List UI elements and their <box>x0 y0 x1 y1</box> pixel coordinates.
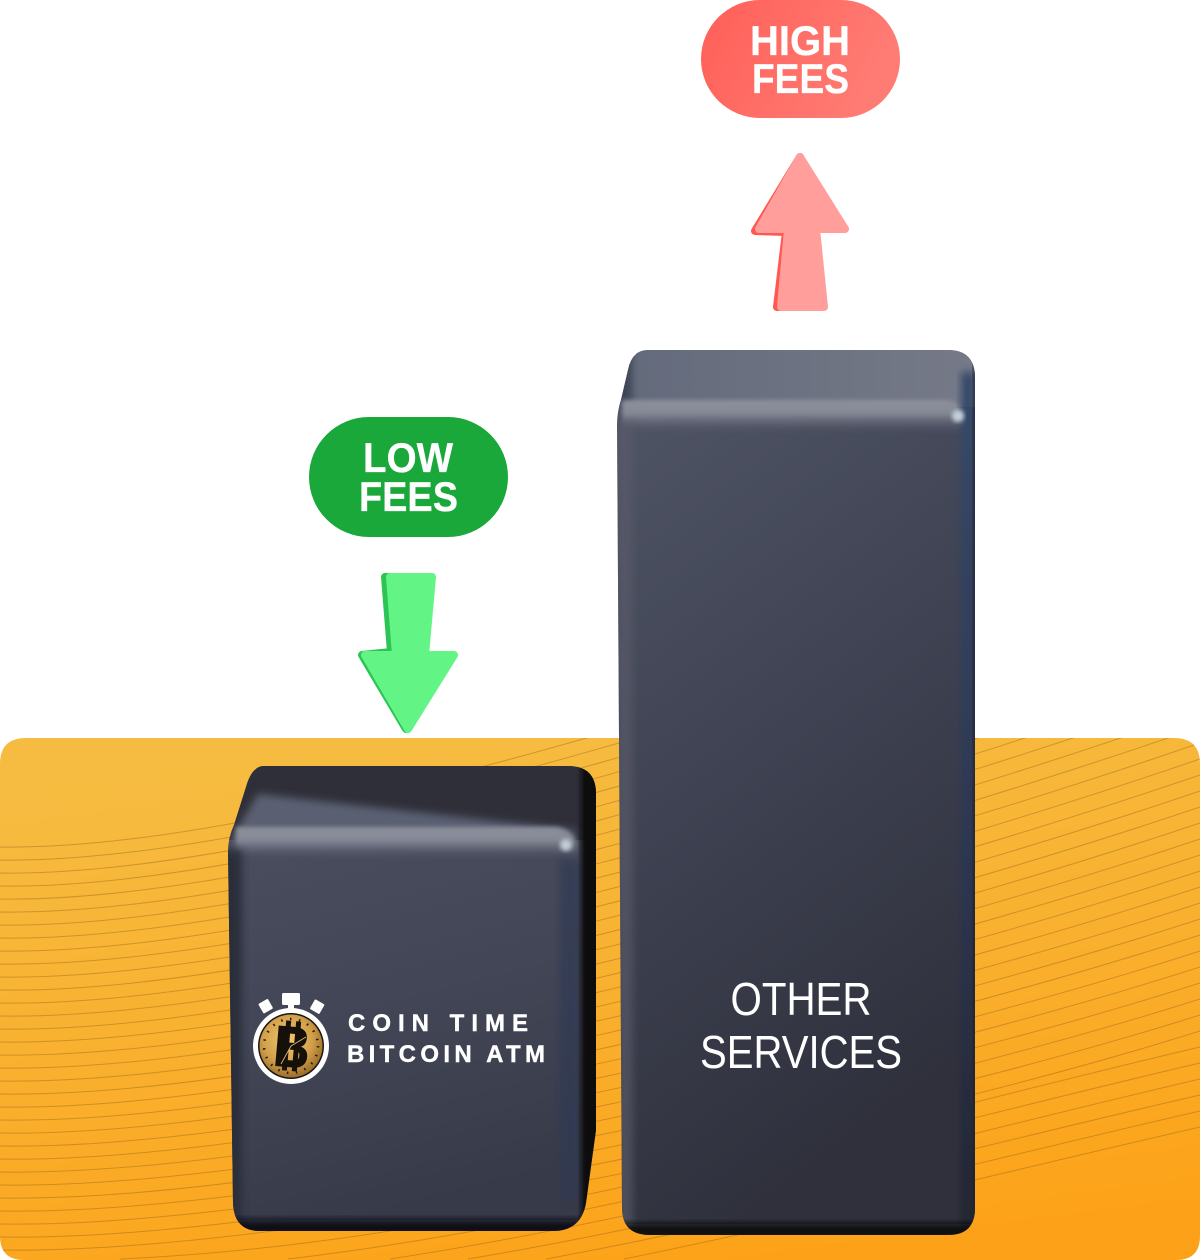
lit wedge on top face <box>232 794 575 845</box>
pill: low fees: FEES <box>359 473 458 520</box>
left dark edge of top face <box>618 356 636 410</box>
right outer edge of tall block <box>972 362 975 1222</box>
pill: high fees <box>701 0 900 118</box>
bar: small dark block (Coin Time) <box>220 760 603 1236</box>
arrow: green down arrow <box>362 577 454 729</box>
bar: tall dark block (other services) <box>610 345 980 1240</box>
label: other services: SERVICES <box>700 1026 902 1078</box>
right strip of tall block <box>961 372 975 1240</box>
top face of tall block <box>619 350 975 407</box>
right inner strip of small block <box>560 860 580 1200</box>
logo text: Coin Time Bitcoin ATM <box>347 1010 545 1068</box>
label: other services: OTHER <box>730 973 872 1025</box>
left edge of tall block <box>617 425 633 1235</box>
bottom edge of small block <box>236 1216 582 1231</box>
pill: low fees <box>309 417 508 537</box>
logo: Coin Time stopwatch icon: B <box>271 1014 313 1081</box>
corner glint of tall block <box>952 410 964 422</box>
logo text: Coin Time Bitcoin ATM: BITCOIN ATM <box>347 1041 545 1068</box>
left edge of small block <box>228 845 246 1228</box>
right dark side of small block <box>578 768 596 1220</box>
highlight band of small block <box>236 827 578 860</box>
corner glint of small block <box>560 839 572 851</box>
arrow: red up arrow <box>755 157 845 307</box>
logo text: Coin Time Bitcoin ATM: COIN TIME <box>348 1010 528 1037</box>
panel: orange base with wavy lines <box>0 738 1200 1260</box>
pill: high fees: HIGH <box>750 17 850 64</box>
logo: Coin Time stopwatch icon <box>253 993 329 1084</box>
pill: low fees: LOW <box>363 434 453 481</box>
highlight band of tall block <box>620 398 964 428</box>
bottom edge of tall block <box>615 1224 980 1238</box>
pill: high fees: FEES <box>752 55 849 102</box>
label: other services <box>700 973 902 1078</box>
top face of small block <box>225 760 600 840</box>
